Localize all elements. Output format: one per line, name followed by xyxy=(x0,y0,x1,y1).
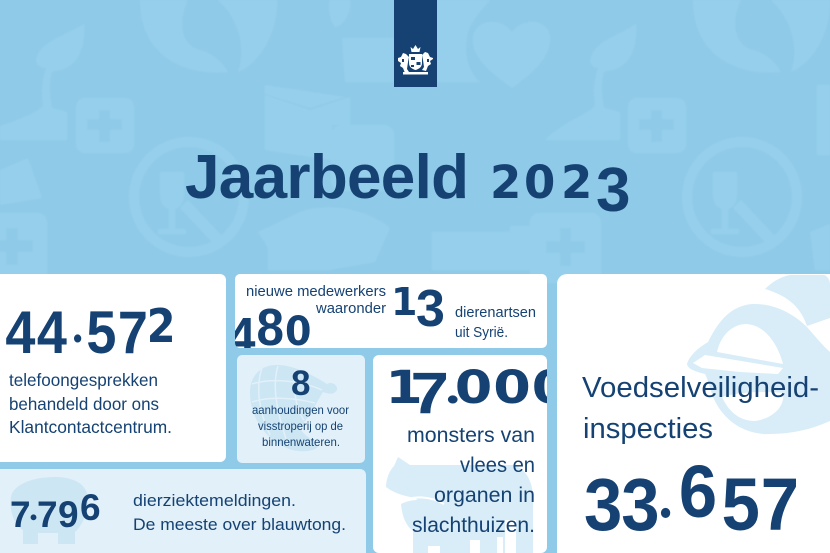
text: arrests: binnenwateren. xyxy=(262,435,340,449)
number: 17.000: 000 xyxy=(455,361,569,414)
icon: box right edge xyxy=(810,85,830,270)
icon: heart xyxy=(473,22,550,88)
panel: animal disease reports xyxy=(0,469,366,553)
text: telephone description: Klantcontactcentrum. xyxy=(9,417,172,437)
number: 17.000: 1 xyxy=(385,361,423,414)
icon: no wine circle right xyxy=(687,142,797,252)
title: 3 xyxy=(596,156,630,225)
panel: telephone calls xyxy=(0,274,226,462)
heading: food safety inspections: inspecties xyxy=(583,413,713,445)
icon: plant right xyxy=(545,24,636,140)
text: disease description: De meeste over blauwtong. xyxy=(133,515,346,534)
number: 44.572: 57 xyxy=(86,299,148,367)
number: 44.572: 2 xyxy=(147,300,176,354)
number: 7.796: 79 xyxy=(37,494,79,535)
text: samples description xyxy=(407,424,535,537)
number: 8: 8 xyxy=(291,364,310,403)
number: 480 xyxy=(235,308,310,348)
heading: food safety inspections xyxy=(582,372,819,445)
icon: no wine circle left xyxy=(134,142,244,252)
logo ribbon xyxy=(394,0,437,87)
icon: open book xyxy=(258,207,390,270)
number: 7.796: 7 xyxy=(10,494,31,535)
icon: person left xyxy=(329,0,394,82)
text: arrests: aanhoudingen voor xyxy=(252,403,349,417)
number: 7.796: 6 xyxy=(80,487,101,528)
icon: cow bottom xyxy=(432,226,530,270)
text: new employees intro xyxy=(246,284,386,317)
number: 44.572: . xyxy=(72,299,83,354)
text: veterinarians xyxy=(455,305,536,341)
title: 202 xyxy=(490,156,592,209)
icon: box left edge xyxy=(0,158,42,205)
heading: food safety inspections: Voedselveiligheid- xyxy=(582,372,819,404)
icon: fishing net xyxy=(250,365,337,451)
number: 33.657: . xyxy=(658,462,673,530)
panel: food safety inspections xyxy=(557,274,830,553)
panel: fish poaching xyxy=(237,355,365,463)
icon: hand with food xyxy=(687,275,830,434)
icon: cow and pig xyxy=(386,457,533,553)
number: 480: 0 xyxy=(285,309,311,355)
number: 33.657: 6 xyxy=(679,451,717,534)
panel: new employees xyxy=(235,274,547,348)
number: 44.572: 44 xyxy=(5,299,67,367)
icon: plus card bottom left xyxy=(0,213,47,283)
icon: cow top xyxy=(437,0,490,82)
icon: box xyxy=(265,85,350,160)
number: 17.000: 7 xyxy=(410,360,449,426)
icon: sheep xyxy=(11,477,88,544)
text: new employees intro: waaronder xyxy=(315,301,386,317)
icon: plus card left xyxy=(76,98,134,153)
number: 17.000: . xyxy=(445,359,460,414)
icon: CE card xyxy=(331,125,394,191)
icon: hand circle left xyxy=(140,0,277,73)
text: telephone description: telefoongesprekken xyxy=(9,370,158,390)
background icon pattern xyxy=(0,0,830,283)
icon: plus card centre xyxy=(530,213,601,283)
text: veterinarians: uit Syrië. xyxy=(455,325,508,341)
number: 7.796: . xyxy=(29,488,38,528)
number: 17.000 xyxy=(391,369,547,414)
number: 33.657: 33 xyxy=(584,464,660,547)
text: samples description: slachthuizen. xyxy=(412,514,535,537)
panel: samples xyxy=(373,355,547,553)
icon: plus card right xyxy=(628,98,686,153)
number: 13: 1 xyxy=(391,280,417,324)
text: new employees intro: nieuwe medewerkers xyxy=(246,284,386,300)
text: disease description xyxy=(133,491,346,534)
number: 480: 48 xyxy=(228,298,284,365)
text: arrests: visstroperij op de xyxy=(258,419,343,433)
text: telephone description xyxy=(9,370,172,437)
text: disease description: dierziektemeldingen. xyxy=(133,491,296,510)
title: Jaarbeeld xyxy=(185,143,469,212)
text: telephone description: behandeld door ons xyxy=(9,394,159,414)
number: 13: 3 xyxy=(416,280,445,338)
title xyxy=(185,143,630,225)
text: arrests xyxy=(252,403,349,449)
text: veterinarians: dierenartsen xyxy=(455,305,536,321)
icon: plant left xyxy=(0,24,84,140)
text: samples description: organen in xyxy=(434,484,535,507)
icon: coat of arms xyxy=(398,45,433,74)
text: samples description: vlees en xyxy=(460,454,535,477)
icon: hand circle right xyxy=(693,0,830,73)
text: samples description: monsters van xyxy=(407,424,535,447)
number: 33.657: 57 xyxy=(722,464,799,547)
